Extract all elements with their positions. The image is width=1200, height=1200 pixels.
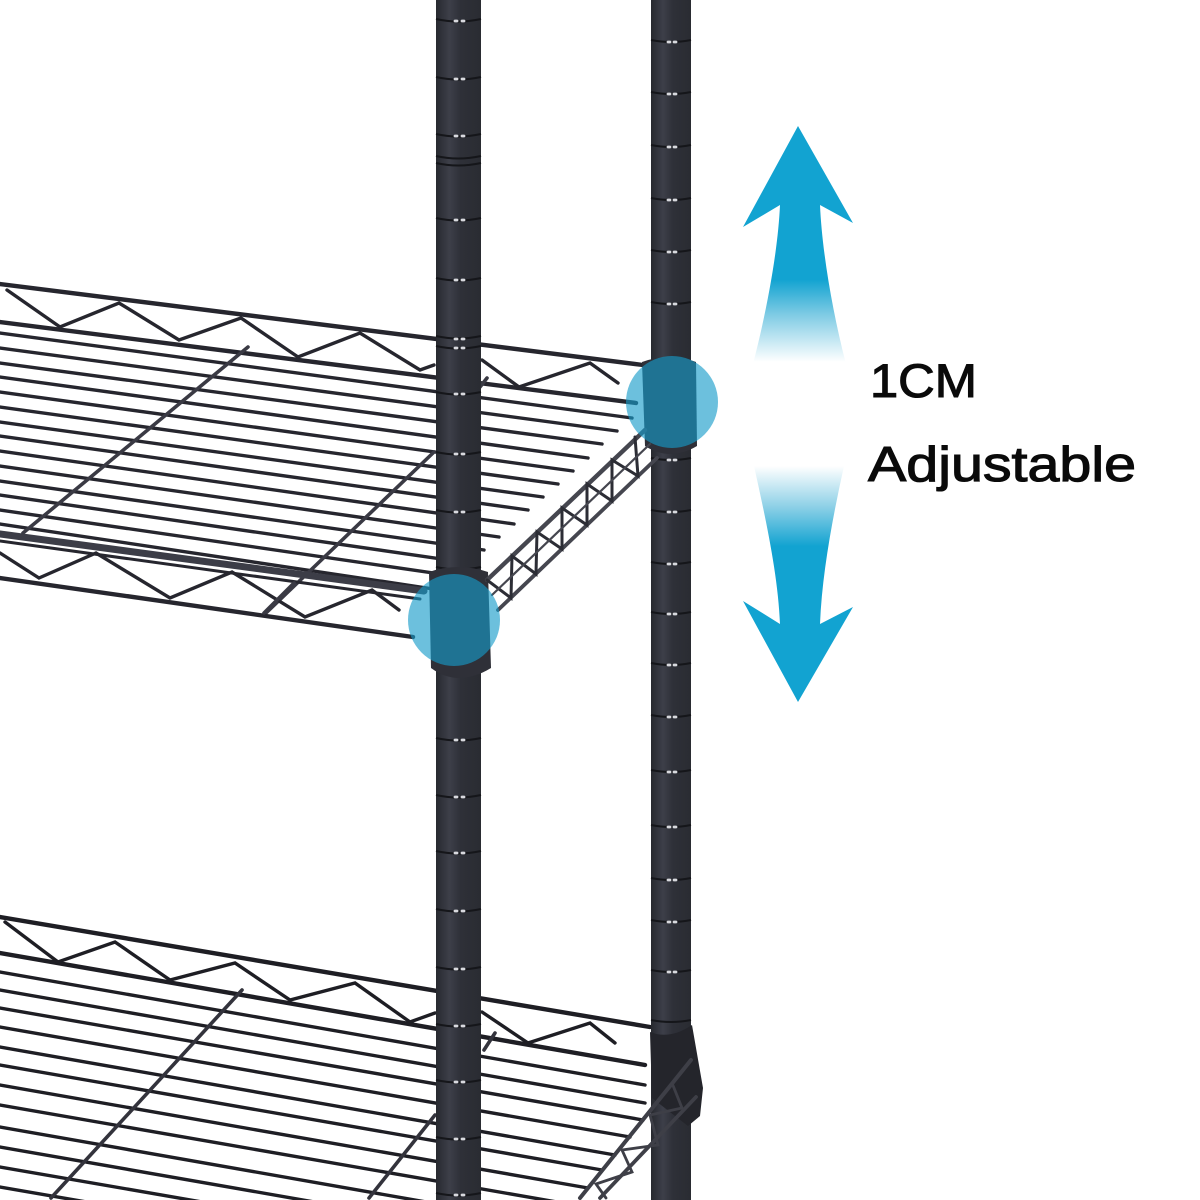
upper shelf side truss — [487, 430, 657, 610]
left sleeve — [429, 567, 491, 678]
lower shelf cross wires — [51, 990, 495, 1198]
lower right sleeve — [650, 1025, 703, 1126]
double arrow — [743, 126, 853, 702]
upper shelf cross wires — [23, 347, 487, 613]
lower shelf wire grid — [0, 917, 650, 1200]
upper shelf wire grid — [0, 284, 643, 637]
highlight circle: left connector — [408, 574, 500, 666]
pole ring highlights — [455, 21, 676, 1195]
label line: Adjustable: Adjustable — [868, 438, 1136, 492]
arrow: down — [743, 466, 853, 702]
upper shelf front rim — [0, 534, 424, 637]
upper shelf back rim — [0, 284, 643, 403]
lower shelf back rim — [0, 917, 650, 1065]
label: 1CM Adjustable — [868, 354, 1136, 492]
lower shelf long wires — [0, 972, 645, 1200]
left pole — [436, 0, 481, 1200]
right sleeve — [642, 357, 697, 454]
highlight circle: right connector — [626, 356, 718, 448]
right pole — [651, 0, 691, 1200]
upper shelf long wires — [0, 333, 632, 590]
left pole rings — [436, 19, 481, 1196]
label line: 1CM: 1CM — [870, 354, 977, 407]
arrow: up — [743, 126, 853, 364]
lower shelf side truss — [580, 1060, 696, 1198]
right pole rings — [651, 40, 691, 1022]
